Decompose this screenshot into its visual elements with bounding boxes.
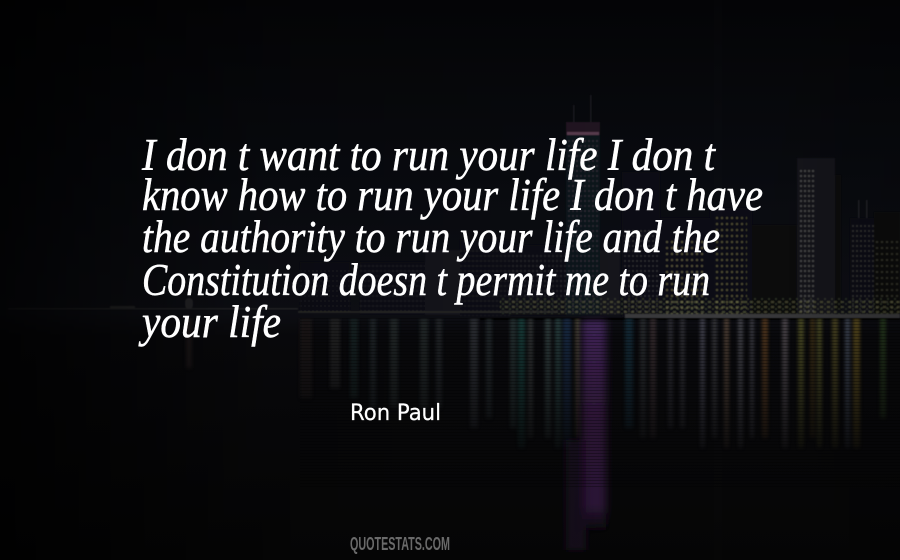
purple tower reflection (566, 320, 606, 550)
city skyline (8, 95, 900, 320)
water reflections of city lights (186, 318, 886, 448)
quote text: the authority to run your life and the (142, 212, 720, 262)
watermark: QUOTESTATS.COM (350, 534, 450, 554)
quote poster (52, 94, 900, 554)
author name: Ron Paul (350, 401, 441, 426)
quote text: know how to run your life I don t have (142, 170, 763, 220)
quote text: Constitution doesn t permit me to run (142, 255, 710, 305)
quote text: your life (138, 297, 281, 347)
quote text: I don t want to run your life I don t (141, 130, 716, 180)
quote text (138, 130, 763, 347)
